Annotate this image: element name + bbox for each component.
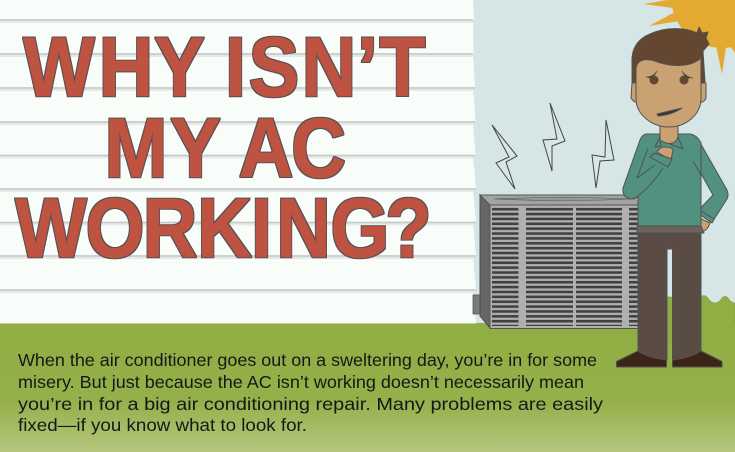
head (636, 58, 701, 127)
right arm (695, 139, 728, 221)
belt (637, 226, 704, 233)
sun (644, 0, 735, 74)
right cuff (696, 209, 714, 223)
sleeve and arm fold lines (634, 148, 701, 199)
house siding (0, 0, 476, 324)
fist at chest (657, 147, 673, 160)
trousers (638, 232, 701, 360)
title: WORKING? (15, 181, 432, 275)
mouth (657, 108, 682, 116)
right hand (693, 216, 710, 232)
title (15, 20, 432, 275)
air conditioner unit (473, 195, 640, 328)
collar (655, 137, 683, 149)
intro paragraph: misery. But just because the AC isn’t working doesn’t necessarily mean (18, 372, 584, 392)
title: MY AC (104, 101, 346, 195)
hair (632, 27, 709, 82)
intro paragraph (18, 350, 603, 435)
neck (660, 122, 678, 144)
ears (631, 83, 638, 102)
grass lawn (0, 323, 735, 452)
eyes and brows (650, 76, 658, 84)
intro paragraph: you’re in for a big air conditioning repair. Many problems are easily (18, 394, 603, 414)
shoes (616, 351, 722, 367)
shirt torso with left sleeve (623, 134, 701, 226)
intro paragraph: fixed—if you know what to look for. (18, 415, 307, 435)
hedge on horizon (655, 296, 735, 330)
lightning bolts (492, 103, 614, 189)
intro paragraph: When the air conditioner goes out on a sweltering day, you’re in for some (18, 350, 597, 370)
title: WHY ISN’T (23, 20, 426, 114)
man (616, 27, 728, 367)
